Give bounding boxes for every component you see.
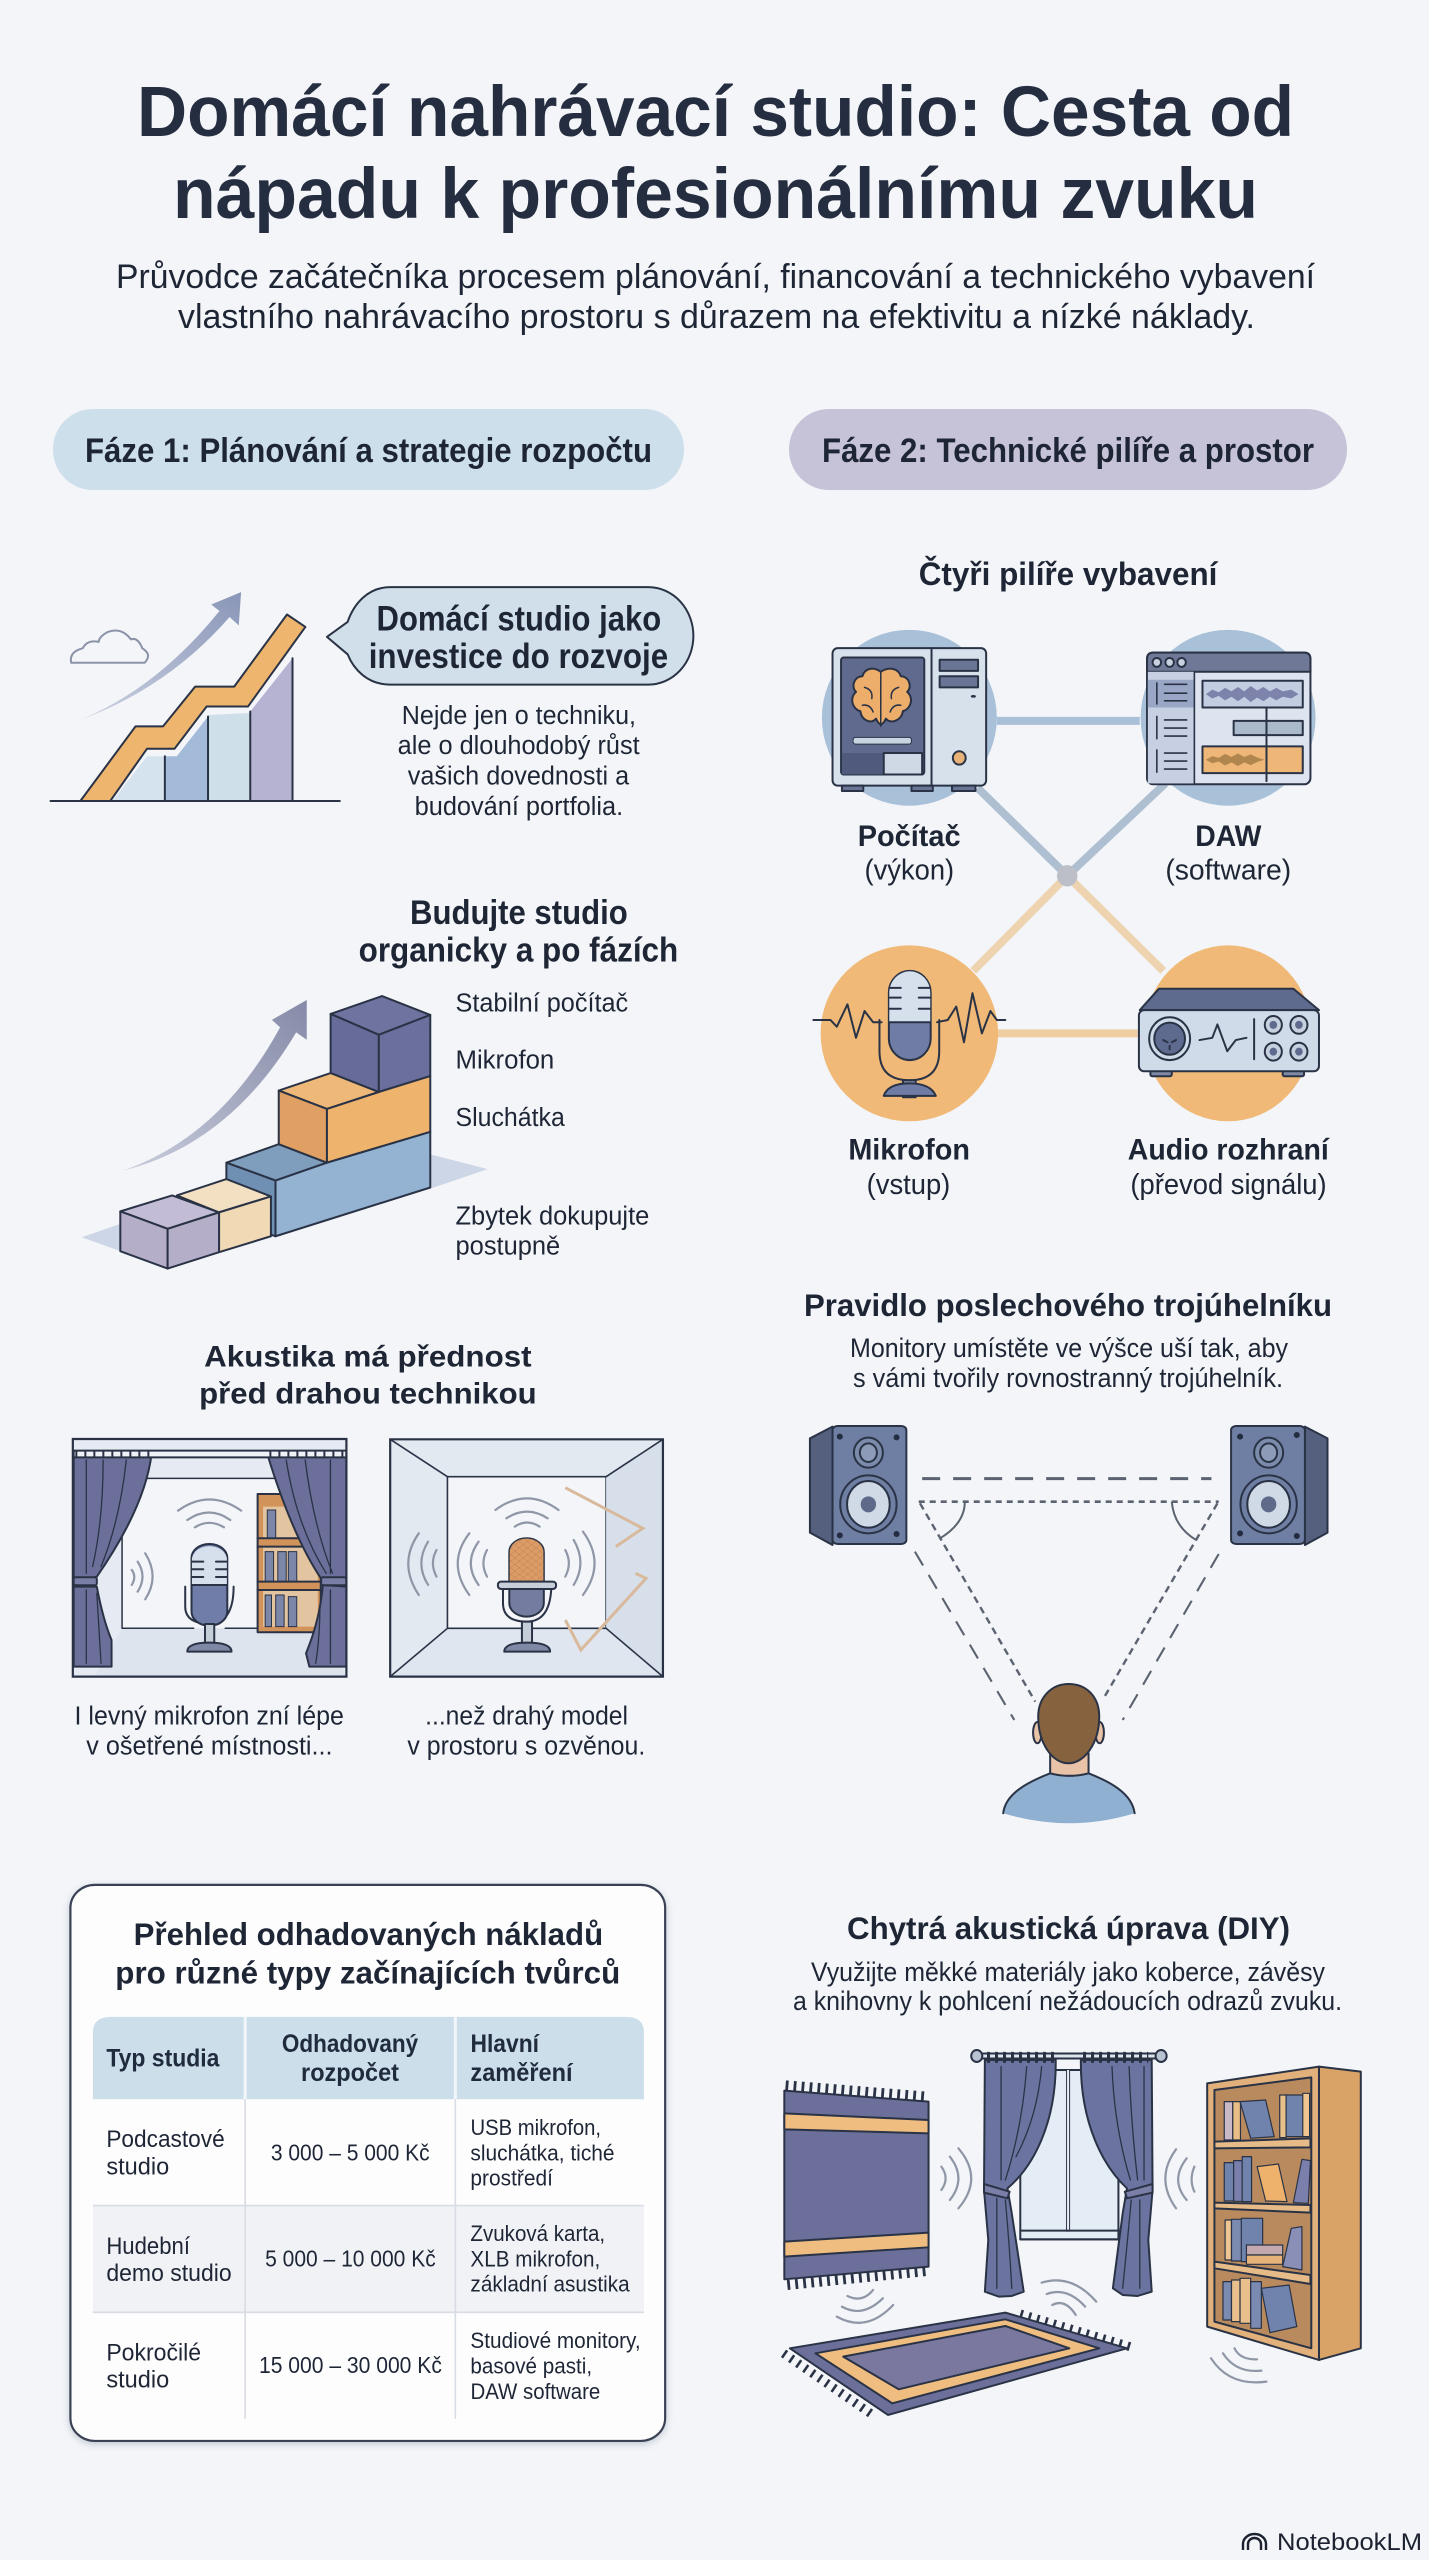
text block: investment note [398,701,640,821]
icon: wall rug [784,2085,929,2285]
table row: podcast studio: sluchátka, tiché [470,2140,615,2165]
heading: acoustics first: Akustika má přednost [204,1340,532,1374]
text block: investment note: vašich dovednosti a [408,762,629,791]
heading: acoustics first [199,1340,537,1410]
caption: echoing room: v prostoru s ozvěnou. [407,1731,645,1760]
table header: rozpočet [301,2058,399,2087]
labels: purchase order: Stabilní počítač [456,989,628,1018]
caption: echoing room: ...než drahý model [425,1701,628,1730]
label: audio interface: (převod signálu) [1130,1169,1327,1200]
heading pill: phase 1: Fáze 1: Plánování a strategie rozpočtu [85,432,652,470]
table row: advanced studio: Pokročilé [106,2339,201,2366]
table title [115,1917,620,1990]
illustration: echoing room [390,1439,663,1677]
table row: music demo studio: Zvuková karta, [470,2220,605,2246]
labels: purchase order: Zbytek dokupujte [456,1201,649,1231]
table header: Hlavní [470,2029,540,2058]
table row shading and rules [93,2099,644,2419]
table header [93,2017,644,2099]
text block: investment note: Nejde jen o techniku, [402,701,636,730]
panel: cost overview table [70,1885,665,2441]
title [137,73,1294,234]
table header: zaměření [470,2058,573,2087]
table row: advanced studio [106,2328,641,2404]
text block: DIY acoustics: a knihovny k pohlcení nežádoucích odrazů zvuku. [793,1986,1342,2016]
table row: advanced studio: basové pasti, [470,2353,592,2378]
caption: treated room: I levný mikrofon zní lépe [75,1701,344,1730]
heading: build organically: Budujte studio [410,894,628,931]
icon: floor rug [783,2313,1135,2417]
speech bubble: home studio as investment [327,587,693,685]
title: Domácí nahrávací studio: Cesta od [137,73,1294,152]
icon: stacked blocks staircase [82,996,488,1269]
heading pill: phase 1 [53,409,684,490]
table title: Přehled odhadovaných nákladů [134,1917,603,1952]
text block: listening triangle rule: Monitory umístěte ve výšce uší tak, aby [850,1333,1288,1363]
icon: left speaker [810,1426,906,1545]
heading: four pillars: Čtyři pilíře vybavení [919,556,1219,592]
text block: DIY acoustics [793,1957,1342,2016]
subtitle [116,258,1316,336]
table row: advanced studio: Studiové monitory, [470,2328,641,2353]
text block: investment note: budování portfolia. [415,792,623,821]
panel: investment and phased building [51,587,693,1269]
triangle dashed lines [915,1479,1219,1720]
table header: Odhadovaný [282,2029,419,2058]
caption: echoing room [407,1701,645,1760]
text block: listening triangle rule: s vámi tvořily rovnostranný trojúhelník. [853,1363,1283,1393]
icon: bookshelf [1207,2067,1361,2360]
text block: listening triangle rule [850,1333,1288,1393]
table row: music demo studio: demo studio [106,2260,232,2287]
panel: DIY acoustic items [783,2050,1361,2417]
label: DAW: DAW [1195,820,1262,853]
subtitle: Průvodce začátečníka procesem plánování, financování a technického vybavení [116,258,1316,296]
caption: treated room [75,1701,344,1760]
icon: microphone [813,945,1005,1121]
table row: podcast studio [106,2114,615,2190]
label: DAW [1165,820,1291,885]
table row: podcast studio: Podcastové [106,2126,225,2153]
table row: podcast studio: prostředí [470,2165,553,2190]
label: microphone [848,1134,970,1200]
label: microphone: Mikrofon [848,1134,970,1167]
icon: right speaker [1231,1426,1328,1545]
heading: build organically: organicky a po fázích [359,932,678,969]
panel: acoustics comparison [73,1340,663,1760]
table row: music demo studio [106,2220,630,2297]
subtitle: vlastního nahrávacího prostoru s důrazem na efektivitu a nízké náklady. [178,298,1255,336]
speech bubble: home studio as investment: Domácí studio jako [377,600,661,639]
diagram: listening triangle [810,1426,1328,1823]
table row: music demo studio: základní asustika [470,2271,630,2297]
label: DAW: (software) [1165,854,1291,885]
title: nápadu k profesionálnímu zvuku [173,155,1258,234]
table row: podcast studio: studio [106,2153,169,2180]
connector lines [973,721,1165,1033]
icon: growth chart [51,592,340,801]
icon: computer [822,630,997,806]
table row: advanced studio: studio [106,2366,169,2393]
table row: advanced studio: DAW software [470,2379,600,2404]
table row: music demo studio: 5 000 – 10 000 Kč [265,2247,436,2272]
illustration: treated room [73,1439,346,1677]
heading: smart DIY acoustics: Chytrá akustická úprava (DIY) [847,1910,1290,1946]
table row: advanced studio: 15 000 – 30 000 Kč [259,2353,442,2379]
icon: audio interface [1139,945,1319,1121]
text block: DIY acoustics: Využijte měkké materiály jako koberce, závěsy [811,1957,1325,1987]
heading pill: phase 2: Fáze 2: Technické pilíře a prostor [822,432,1314,470]
labels: purchase order: postupně [456,1232,560,1261]
brand mark: NotebookLM: NotebookLM [1277,2529,1422,2556]
labels: purchase order: Mikrofon [456,1046,554,1075]
label: audio interface [1128,1134,1330,1200]
labels: purchase order [456,989,649,1261]
panel: four pillars diagram [813,556,1330,1200]
table title: pro různé typy začínajících tvůrců [115,1956,620,1990]
card background [70,1885,665,2441]
icon: DAW software [1141,630,1316,806]
table row: music demo studio: XLB mikrofon, [470,2246,600,2271]
table row: music demo studio: Hudební [106,2233,190,2260]
text block: investment note: ale o dlouhodobý růst [398,731,640,760]
heading: acoustics first: před drahou technikou [199,1377,537,1410]
label: computer [858,820,961,885]
table header: Typ studia [106,2043,220,2072]
heading: build organically [359,894,678,969]
label: computer: (výkon) [865,854,954,885]
speech bubble: home studio as investment: investice do rozvoje [369,638,668,677]
heading: listening triangle: Pravidlo poslechového trojúhelníku [804,1287,1332,1323]
icon: curtains and window [971,2050,1167,2297]
heading pill: phase 2 [789,409,1347,490]
labels: purchase order: Sluchátka [456,1103,565,1132]
icon: listener [1003,1684,1135,1823]
icons: sound absorption waves [837,2148,1266,2382]
table row: podcast studio: USB mikrofon, [470,2114,601,2140]
table row: podcast studio: 3 000 – 5 000 Kč [271,2141,430,2166]
label: microphone: (vstup) [867,1169,950,1200]
caption: treated room: v ošetřené místnosti... [86,1731,333,1760]
label: computer: Počítač [858,820,961,853]
label: audio interface: Audio rozhraní [1128,1134,1330,1167]
